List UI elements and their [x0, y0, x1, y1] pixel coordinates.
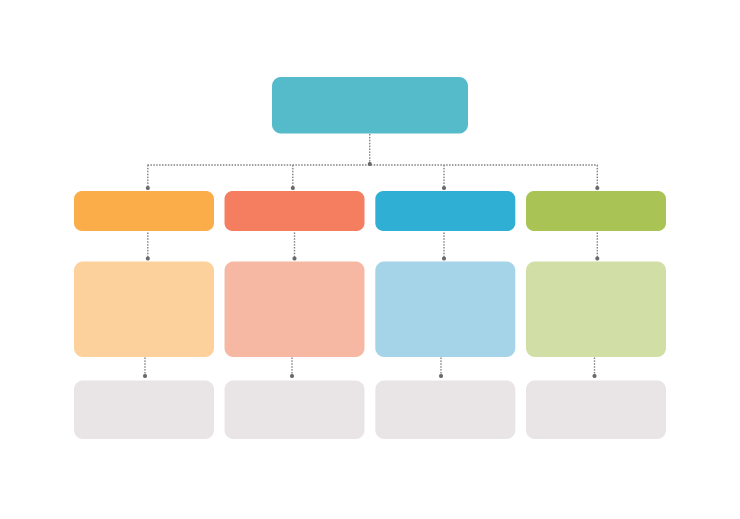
green body box [526, 262, 666, 357]
orange column grey box [74, 380, 214, 439]
connector: red body to grey box [290, 358, 294, 378]
green header box [526, 191, 666, 231]
column: green [526, 191, 666, 439]
connector: green body to grey box [592, 358, 596, 378]
connector: blue body to grey box [439, 358, 443, 378]
red column grey box [224, 380, 364, 439]
top box [272, 77, 468, 134]
column: blue [375, 191, 515, 439]
connector: blue header to body [442, 232, 446, 260]
connector: top box to second-level boxes [146, 134, 599, 190]
blue body box [375, 262, 515, 357]
red header box [224, 191, 364, 231]
blue column grey box [375, 380, 515, 439]
connector: orange body to grey box [143, 358, 147, 378]
connector: orange header to body [146, 232, 150, 260]
blue header box [375, 191, 515, 231]
red body box [224, 262, 364, 357]
orange header box [74, 191, 214, 231]
orange body box [74, 262, 214, 357]
connector: green header to body [595, 232, 599, 260]
column: orange [74, 191, 214, 439]
green column grey box [526, 380, 666, 439]
column: red [224, 191, 364, 439]
connector: red header to body [292, 232, 296, 260]
